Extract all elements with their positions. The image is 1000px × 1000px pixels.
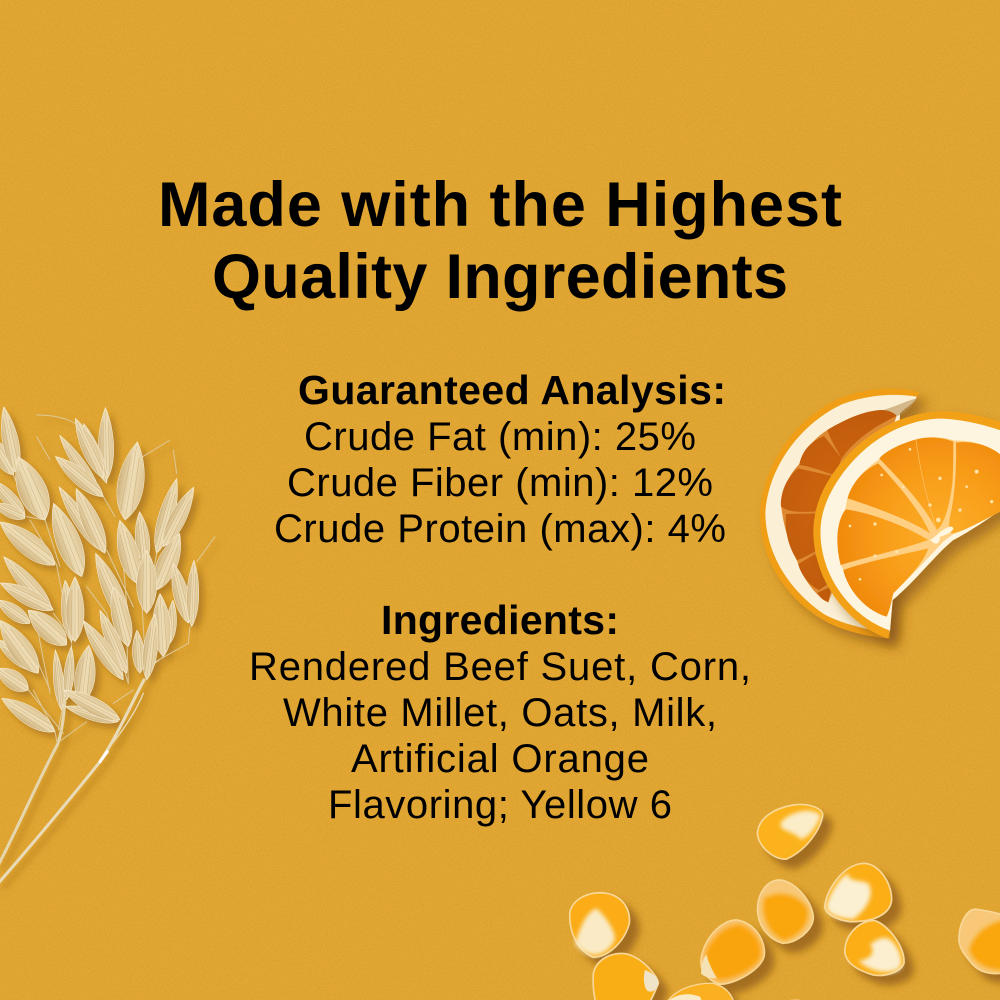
corn kernel 7: [701, 920, 764, 984]
title: [158, 170, 842, 312]
corn kernel 2: [758, 880, 813, 943]
text block: ingredients: Artificial Orange: [351, 737, 649, 781]
text block: guaranteed analysis: [274, 367, 726, 551]
icon: corn kernels: [570, 804, 1000, 1000]
oat stems: [0, 415, 215, 883]
text block: guaranteed analysis: Crude Fiber (min): 12%: [287, 461, 713, 505]
corn kernel 10: [783, 999, 808, 1000]
text block: ingredients: [249, 597, 751, 827]
corn kernel 1: [758, 804, 823, 859]
back orange slice: [760, 389, 920, 639]
icon: orange slices: [760, 389, 1000, 639]
title: Made with the Highest: [158, 170, 842, 240]
heading: guaranteed analysis: Guaranteed Analysis:: [298, 367, 726, 413]
heading: ingredients: Ingredients:: [381, 597, 619, 643]
corn kernel 5: [959, 909, 1000, 974]
text block: ingredients: Rendered Beef Suet, Corn,: [249, 645, 751, 689]
text block: guaranteed analysis: Crude Protein (max): 4%: [274, 507, 726, 551]
corn kernel 3: [825, 863, 892, 922]
text block: guaranteed analysis: Crude Fat (min): 25%: [304, 415, 696, 459]
corn kernel 4: [845, 921, 904, 975]
corn kernel 8: [593, 954, 658, 1000]
front orange slice: [813, 411, 1000, 639]
text block: ingredients: White Millet, Oats, Milk,: [283, 691, 717, 735]
title: Quality Ingredients: [212, 242, 788, 312]
back slice segments: [781, 410, 897, 603]
text block: ingredients: Flavoring; Yellow 6: [328, 783, 672, 827]
corn kernel 9: [667, 983, 734, 1000]
icon: oat sprig: [0, 405, 215, 883]
front slice segments: [837, 437, 1000, 617]
corn kernel 6: [570, 893, 629, 957]
